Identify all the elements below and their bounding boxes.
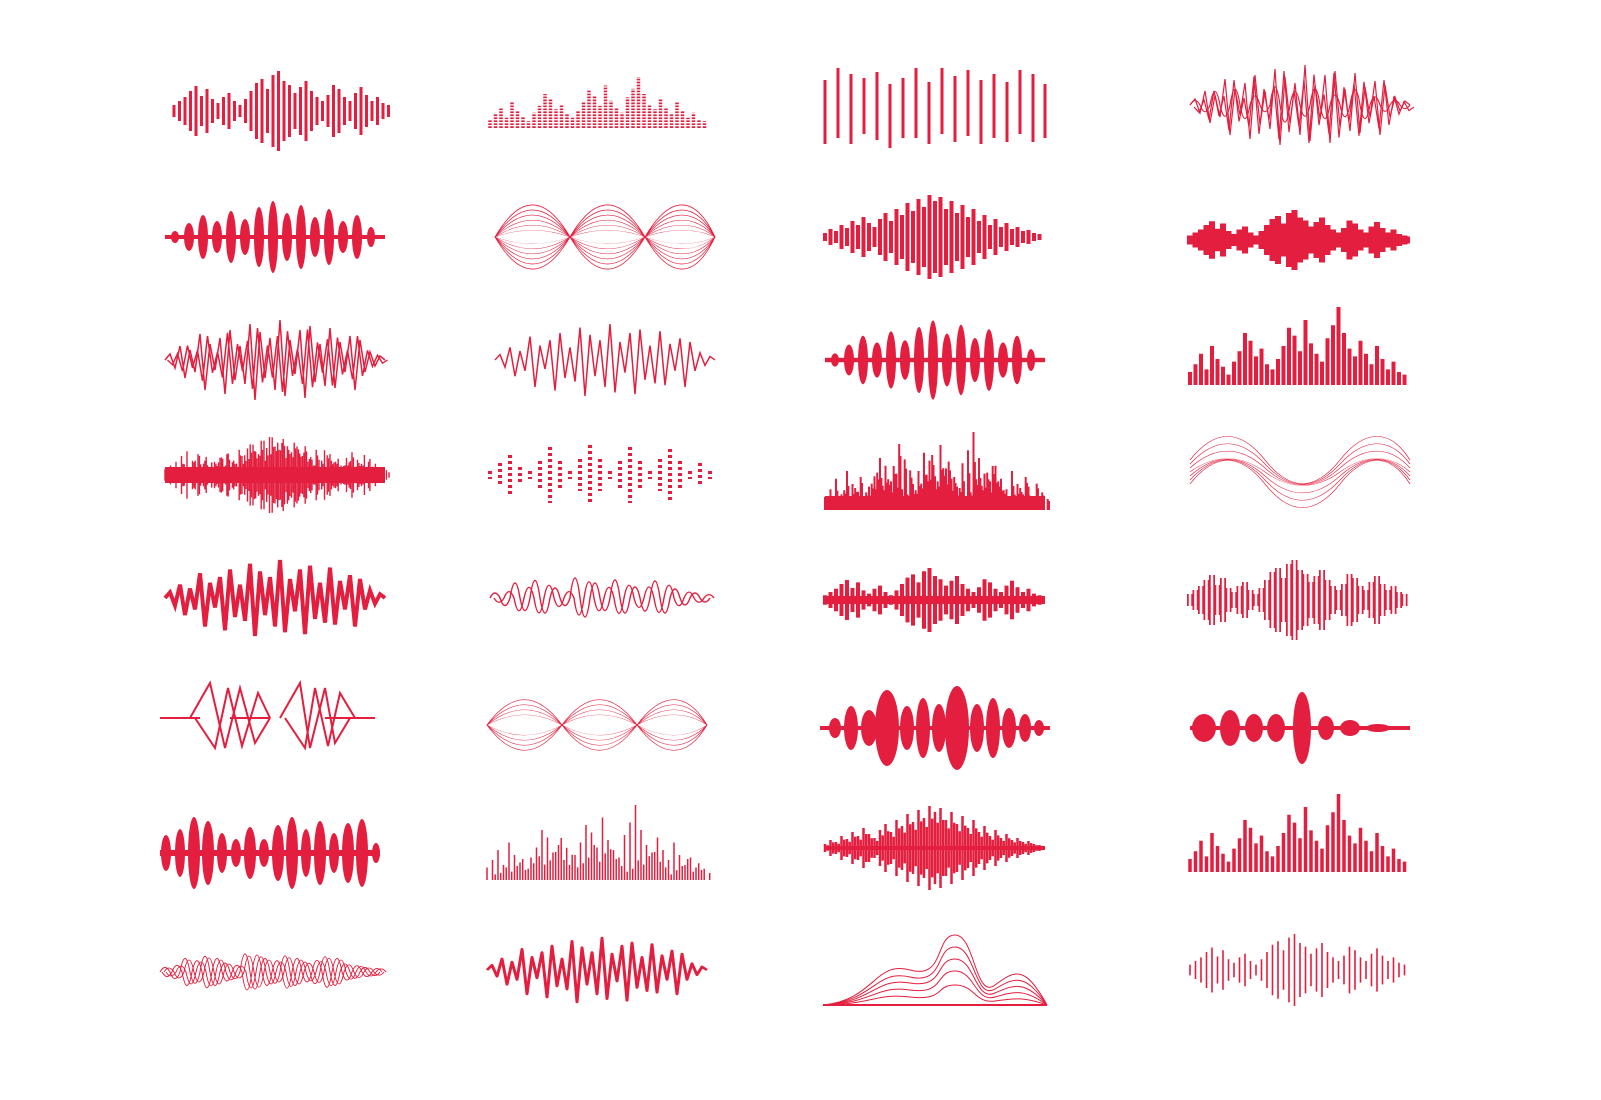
icon: row5 col3 bars with line [825,568,1045,632]
icon: row8 col3 bump mesh [823,935,1047,1005]
icon: row2 col4 thick bars [1190,210,1410,270]
icon: row1 col4 tangled lines [1190,65,1414,145]
icon: row3 col2 thin zigzag [495,324,715,396]
icon: row4 col2 dot diamonds [490,445,710,505]
icon: row4 col4 mesh wave [1190,436,1410,508]
icon: row3 col3 filled lobes [825,320,1045,400]
icon: row1 col2 dotted equalizer [490,77,704,128]
icon: row3 col1 dense zigzag [165,320,388,400]
icon: row7 col4 bottom dashed bars [1190,794,1404,872]
icon: row4 col1 noise [165,437,389,513]
icon: row5 col4 outlined bars [1190,560,1404,640]
icon: row8 col2 thick line wave [487,938,707,1002]
icon: row6 col4 decaying blobs [1190,692,1410,764]
icon: row1 col3 spaced lines [825,68,1045,148]
icon: row4 col3 bottom spikes [825,432,1049,510]
icon: row8 col4 thin bars [1190,934,1404,1006]
icon: row7 col1 thick lobes [160,817,380,889]
icon: row6 col2 twisted mesh [487,700,707,750]
icon: row6 col3 filled blobs [820,686,1050,770]
icon: row1 col1 bars [174,71,388,151]
icon: row7 col3 spiky diamond [825,806,1045,890]
icon: row8 col1 dense sine lines [160,954,386,990]
icon: row5 col1 thick zigzag [165,560,385,636]
icon: row2 col3 diamond bars [825,195,1040,279]
icon: row5 col2 thin sine lines [490,578,714,617]
icon: row2 col2 mesh wave [495,205,715,269]
icon: row7 col2 thin bottom bars [487,805,710,880]
icon: row2 col1 filled lobe wave [165,201,385,273]
icon: row6 col1 angular lines [160,683,375,748]
icon: row3 col4 bottom bars [1190,307,1404,385]
